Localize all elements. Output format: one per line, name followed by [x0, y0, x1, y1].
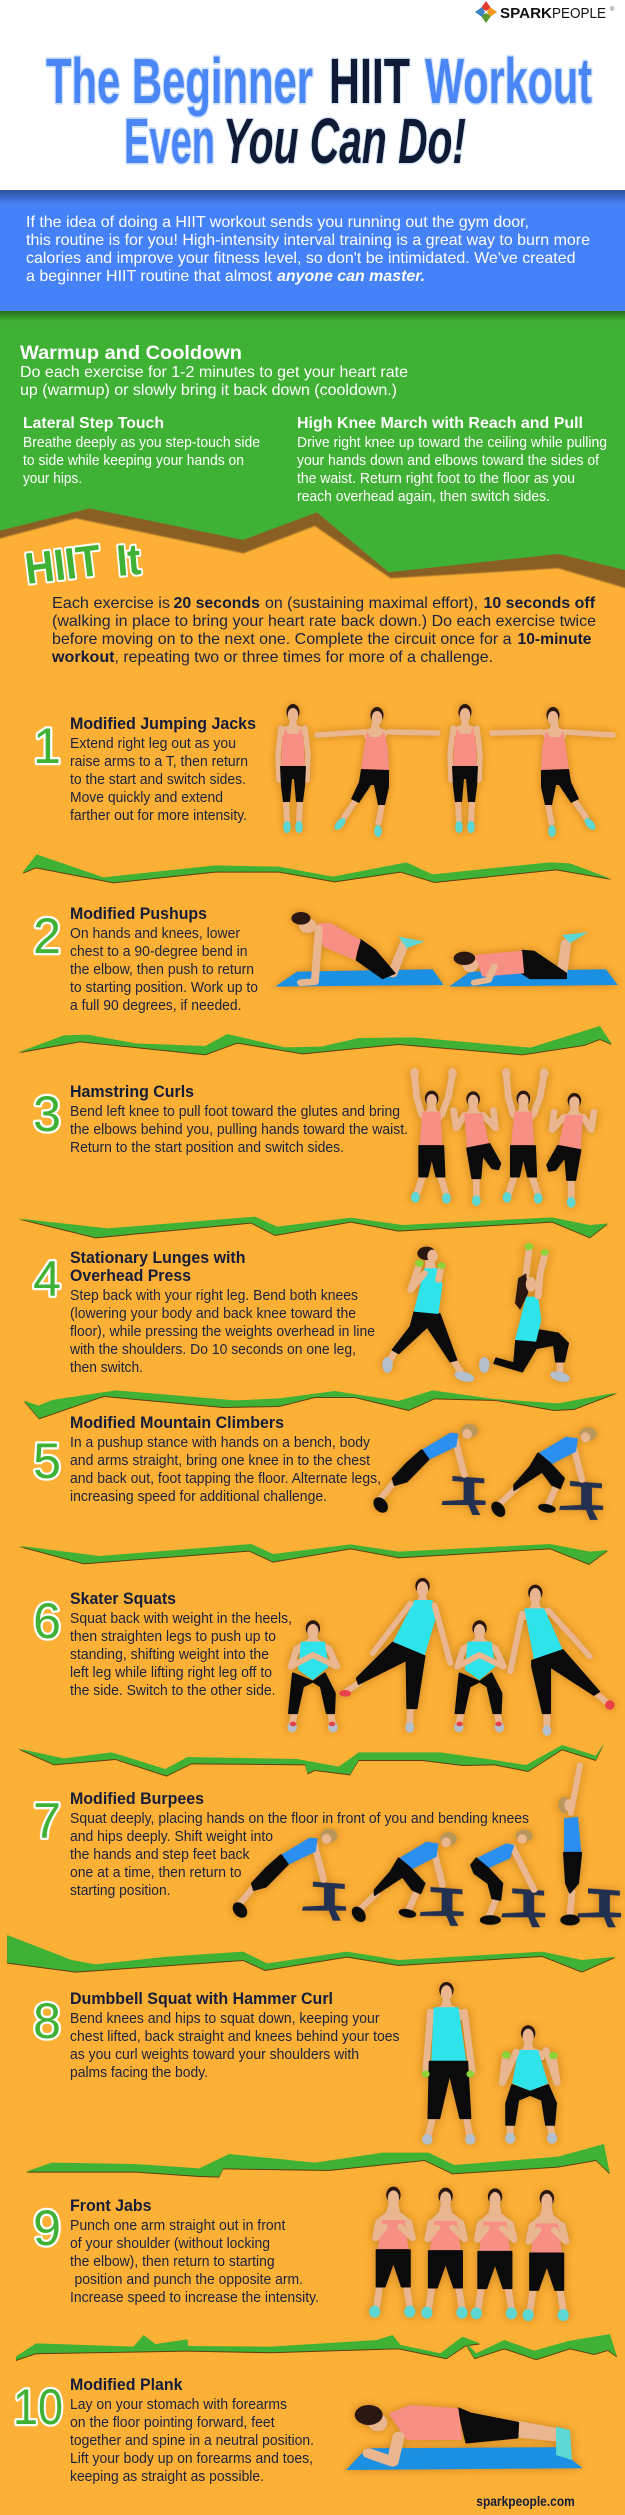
divider 6	[18, 1743, 604, 1776]
title: Even	[124, 105, 215, 177]
divider 3	[18, 1217, 608, 1237]
exercise 10 text: Modified Plank	[70, 2376, 183, 2394]
exercise 7 text	[70, 1790, 529, 1899]
HIIT instructions text: 10-minute	[518, 631, 592, 648]
exercise 8 text	[70, 1990, 400, 2081]
HIIT instructions text: 10 seconds off	[484, 595, 596, 612]
exercise 7 text: the hands and step feet back	[70, 1846, 250, 1863]
figures: squat with curl	[422, 1982, 558, 2145]
exercise 3: hamstring curls	[33, 1068, 594, 1208]
intro text: this routine is for you! High-intensity interval training is a great way to burn more	[26, 232, 590, 249]
number 10: 10	[13, 2379, 63, 2435]
footer url: sparkpeople.com	[476, 2494, 575, 2509]
figures: jumping jacks	[278, 704, 613, 837]
figure: plank on mat	[346, 2405, 583, 2470]
exercise 10 text: together and spine in a neutral position.	[70, 2432, 314, 2449]
figures: burpees with bench	[231, 1765, 621, 1927]
exercise 3 text: Bend left knee to pull foot toward the glutes and bring	[70, 1103, 400, 1120]
exercise 5 text: and arms straight, bring one knee in to the chest	[70, 1452, 371, 1469]
exercise 9 text: the elbow), then return to starting	[70, 2253, 275, 2270]
exercise 9 text: Front Jabs	[70, 2197, 152, 2215]
divider 8	[26, 2144, 610, 2177]
number 1: 1	[33, 718, 61, 774]
exercise 6 text: standing, shifting weight into the	[70, 1646, 269, 1663]
exercise 5 text: Modified Mountain Climbers	[70, 1414, 284, 1432]
exercise 4 text: floor), while pressing the weights overhead in line	[70, 1323, 375, 1340]
HIIT instructions text: (walking in place to bring your heart rate back down.) Do each exercise twice	[52, 613, 596, 630]
exercise 1 text: raise arms to a T, then return	[70, 753, 248, 770]
exercise 10 text	[70, 2376, 314, 2485]
exercise 7 text: starting position.	[70, 1882, 170, 1899]
warmup exercise: high knee march: your hands down and elbows toward the sides of	[297, 452, 600, 469]
exercise 4: stationary lunges	[33, 1243, 572, 1384]
intro text	[26, 214, 590, 285]
exercise 6 text: Skater Squats	[70, 1590, 176, 1608]
number 6: 6	[33, 1593, 61, 1649]
exercise 5 text: increasing speed for additional challenge.	[70, 1488, 327, 1505]
divider 2	[18, 1026, 612, 1054]
exercise 10 text: keeping as straight as possible.	[70, 2468, 264, 2485]
warmup heading: Warmup and Cooldown	[20, 343, 242, 364]
exercise 7 text: and hips deeply. Shift weight into	[70, 1828, 273, 1845]
exercise 4 text: Step back with your right leg. Bend both knees	[70, 1287, 358, 1304]
exercise 1 text: Modified Jumping Jacks	[70, 715, 256, 733]
HIIT instructions text: 20 seconds	[174, 595, 260, 612]
intro text: If the idea of doing a HIIT workout sends you running out the gym door,	[26, 214, 529, 231]
intro text: a beginner HIIT routine that almost	[26, 268, 273, 285]
warmup text: up (warmup) or slowly bring it back down (cooldown.)	[20, 382, 397, 399]
number 7: 7	[33, 1793, 61, 1849]
figures: mountain climbers on bench	[372, 1424, 603, 1520]
logo: SparkPeople	[475, 1, 615, 23]
exercise 6 text: the side. Switch to the other side.	[70, 1682, 276, 1699]
heading: HIIT It: HIIT	[22, 536, 104, 594]
exercise 7: modified burpees	[33, 1765, 621, 1927]
warmup exercise: high knee march: Drive right knee up toward the ceiling while pulling	[297, 434, 607, 451]
exercise 9 text: Increase speed to increase the intensity.	[70, 2289, 319, 2306]
brown mountain shadow band	[0, 508, 625, 653]
heading: HIIT It: It	[115, 535, 143, 586]
exercise 10: modified plank	[13, 2376, 583, 2485]
title: You Can Do!	[223, 105, 466, 177]
title: The Beginner	[46, 45, 313, 117]
exercise 1 text: Move quickly and extend	[70, 789, 223, 806]
HIIT instructions text: workout	[51, 649, 115, 666]
warmup exercise: lateral step touch: to side while keeping your hands on	[23, 452, 244, 469]
warmup exercise: high knee march	[297, 415, 607, 505]
exercise 4 text: Stationary Lunges with	[70, 1249, 246, 1267]
exercise 7 text: one at a time, then return to	[70, 1864, 242, 1881]
exercise 5 text	[70, 1414, 381, 1505]
exercise 4 text	[69, 1249, 375, 1376]
exercise 8 text: Dumbbell Squat with Hammer Curl	[70, 1990, 333, 2008]
exercise 3 text: the elbows behind you, pulling hands toward the waist.	[70, 1121, 408, 1138]
divider 9	[16, 2334, 617, 2360]
HIIT instructions text	[51, 595, 596, 666]
warmup exercise: lateral step touch: your hips.	[23, 470, 82, 487]
exercise 3 text: Hamstring Curls	[70, 1083, 194, 1101]
exercise 7 text: Modified Burpees	[70, 1790, 204, 1808]
exercise 4 text: Overhead Press	[70, 1267, 191, 1285]
exercise 2 text: to starting position. Work up to	[70, 979, 258, 996]
panel: warmup and cooldown	[0, 311, 625, 591]
number 5: 5	[33, 1433, 61, 1489]
divider 1	[23, 854, 612, 882]
exercise 4 text: with the shoulders. Do 10 seconds on one leg,	[69, 1341, 356, 1358]
exercise 8 text: as you curl weights toward your shoulders with	[70, 2046, 359, 2063]
exercise 2: modified pushups	[33, 905, 618, 1014]
number 4: 4	[33, 1251, 61, 1307]
exercise 10 text: Lift your body up on forearms and toes,	[70, 2450, 313, 2467]
exercise 1: modified jumping jacks	[33, 704, 613, 837]
title: HIIT	[329, 45, 410, 117]
HIIT instructions text: , repeating two or three times for more of a challenge.	[114, 649, 493, 666]
exercise 8: dumbbell squat with hammer curl	[33, 1982, 558, 2145]
exercise 10 text: on the floor pointing forward, feet	[70, 2414, 275, 2431]
HIIT instructions text: on (sustaining maximal effort),	[265, 595, 478, 612]
intro text: calories and improve your fitness level, so don't be intimidated. We've created	[26, 250, 576, 267]
header background	[0, 0, 625, 190]
exercise 6 text: then straighten legs to push up to	[70, 1628, 276, 1645]
figures: hamstring curls	[410, 1068, 594, 1208]
logo: SparkPeople: PEOPLE	[552, 5, 606, 22]
exercise 10 text: Lay on your stomach with forearms	[70, 2396, 287, 2413]
exercise 2 text: Modified Pushups	[70, 905, 207, 923]
panel: intro	[0, 190, 625, 311]
exercise 4 text: then switch.	[70, 1359, 143, 1376]
exercise 5 text: and back out, foot tapping the floor. Alternate legs,	[70, 1470, 381, 1487]
exercise 5: modified mountain climbers	[33, 1414, 603, 1520]
figures: skater squats	[287, 1578, 615, 1736]
divider 4	[24, 1390, 618, 1418]
figures: lunges with press	[382, 1243, 572, 1384]
exercise 1 text	[70, 715, 256, 824]
exercise 3 text: Return to the start position and switch sides.	[70, 1139, 344, 1156]
exercise 1 text: Extend right leg out as you	[70, 735, 236, 752]
exercise 8 text: chest lifted, back straight and knees behind your toes	[70, 2028, 400, 2045]
exercise 8 text: palms facing the body.	[70, 2064, 208, 2081]
logo: SparkPeople: ®	[610, 6, 615, 13]
exercise 9: front jabs	[33, 2187, 569, 2321]
exercise 9 text: Punch one arm straight out in front	[70, 2217, 286, 2234]
warmup text	[20, 364, 408, 399]
exercise 9 text	[70, 2197, 319, 2306]
exercise 6 text: Squat back with weight in the heels,	[70, 1610, 292, 1627]
exercise 9 text: of your shoulder (without locking	[70, 2235, 270, 2252]
exercise 6 text: left leg while lifting right leg off to	[70, 1664, 272, 1681]
exercise 9 text: position and punch the opposite arm.	[74, 2271, 303, 2288]
exercise 2 text: On hands and knees, lower	[70, 925, 240, 942]
figures: front jabs	[369, 2187, 569, 2321]
number 9: 9	[33, 2200, 61, 2256]
logo: SparkPeople: SPARK	[500, 5, 552, 22]
exercise 2 text: a full 90 degrees, if needed.	[70, 997, 242, 1014]
title	[46, 45, 592, 177]
HIIT instructions text: Each exercise is	[52, 595, 170, 612]
exercise 8 text: Bend knees and hips to squat down, keeping your	[70, 2010, 380, 2027]
HIIT instructions text: before moving on to the next one. Complete the circuit once for a	[52, 631, 512, 648]
divider 7	[7, 1935, 616, 1972]
exercise 5 text: In a pushup stance with hands on a bench, body	[70, 1434, 370, 1451]
warmup text: Do each exercise for 1-2 minutes to get your heart rate	[20, 364, 408, 381]
divider 5	[18, 1544, 608, 1564]
warmup exercise: lateral step touch	[23, 415, 260, 487]
exercise 3 text	[70, 1083, 408, 1156]
number 3: 3	[33, 1086, 61, 1142]
exercise 1 text: farther out for more intensity.	[70, 807, 247, 824]
exercise 2 text: chest to a 90-degree bend in	[70, 943, 248, 960]
figures: pushups on mats	[275, 912, 618, 987]
exercise 7 text: Squat deeply, placing hands on the floor in front of you and bending knees	[70, 1810, 529, 1827]
warmup exercise: lateral step touch: Lateral Step Touch	[23, 415, 164, 432]
warmup exercise: lateral step touch: Breathe deeply as you step-touch side	[23, 434, 260, 451]
exercise 2 text: the elbow, then push to return	[70, 961, 254, 978]
warmup exercise: high knee march: the waist. Return right foot to the floor as you	[297, 470, 575, 487]
exercise 4 text: (lowering your body and back knee toward the	[70, 1305, 356, 1322]
exercise 6 text	[70, 1590, 292, 1699]
warmup exercise: high knee march: High Knee March with Reach and Pull	[297, 415, 583, 432]
exercise 1 text: to the start and switch sides.	[70, 771, 246, 788]
exercise 2 text	[70, 905, 258, 1014]
warmup exercise: high knee march: reach overhead again, then switch sides.	[297, 488, 550, 505]
panel: orange background	[0, 518, 625, 2515]
exercise 6: skater squats	[33, 1578, 615, 1736]
number 2: 2	[33, 908, 61, 964]
number 8: 8	[33, 1993, 61, 2049]
intro text: anyone can master.	[277, 268, 425, 285]
